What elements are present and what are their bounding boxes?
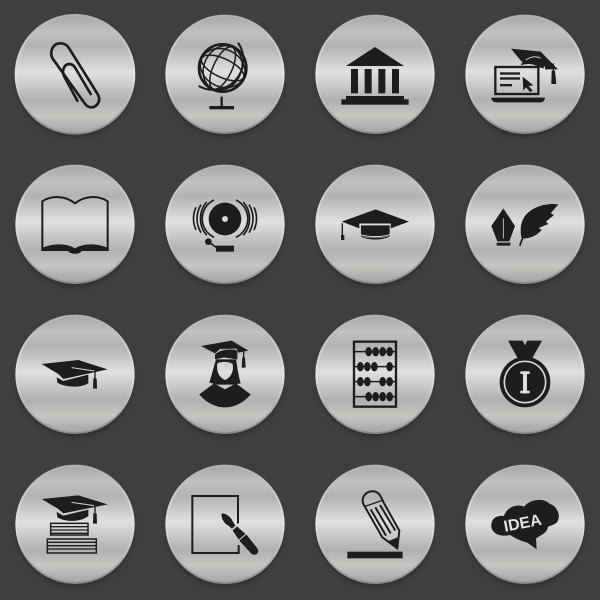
panel: medal: [466, 316, 584, 438]
icon: books and cap: [42, 495, 108, 553]
icon: pencil: [347, 491, 403, 558]
icon: abacus: [354, 342, 396, 407]
panel: online graduation: [466, 16, 584, 138]
panel: graduation cap front: [316, 166, 434, 288]
icon: paper and pen: [192, 496, 260, 557]
icon: book: [41, 197, 109, 254]
panel: mortarboard: [16, 316, 134, 438]
panel: paperclip: [16, 15, 134, 138]
panel: university building: [316, 16, 434, 138]
icon: nib and feather: [491, 204, 558, 246]
panel: books with cap: [16, 466, 134, 588]
panel: alarm bell: [166, 166, 284, 288]
icon: graduate: [199, 341, 251, 407]
panel: abacus: [316, 316, 434, 438]
panel: globe: [166, 16, 284, 138]
panel: pencil and line: [316, 466, 434, 588]
icon: bell: [193, 200, 257, 252]
icon: paperclip: [51, 43, 99, 107]
icon: cap: [341, 209, 409, 240]
panel: open book: [16, 166, 134, 288]
panel: paper and fountain pen: [166, 466, 284, 588]
icon: globe: [194, 39, 251, 109]
icon: mortarboard: [42, 360, 108, 389]
text: IDEA: IDEA: [502, 512, 544, 536]
icon: building: [341, 47, 409, 105]
icon: medal: [500, 341, 550, 407]
panel: idea speech cloud: [466, 466, 584, 588]
panel: graduate woman: [166, 316, 284, 438]
icon: laptop with cap: [491, 49, 558, 102]
panel: pen nib and feather: [466, 166, 584, 288]
